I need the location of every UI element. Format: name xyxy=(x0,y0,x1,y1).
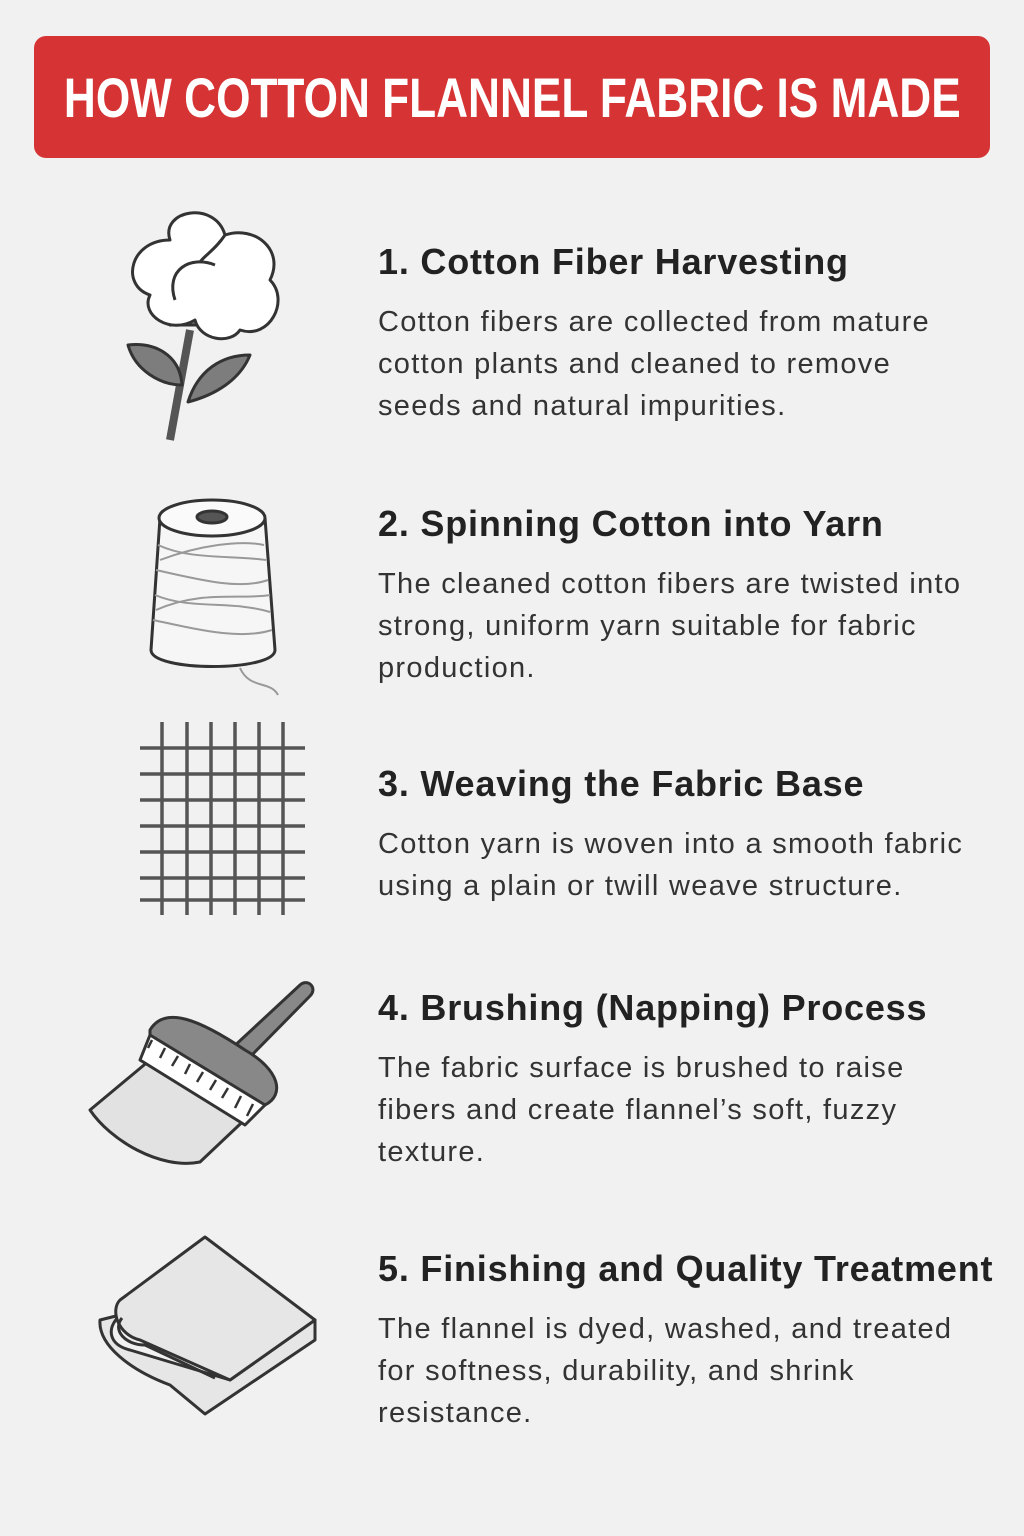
step 1: seeds and natural impurities. xyxy=(378,390,786,422)
step 3 xyxy=(378,763,963,902)
step 1: 1. Cotton Fiber Harvesting xyxy=(378,241,849,282)
step 4: 4. Brushing (Napping) Process xyxy=(378,987,927,1028)
title banner xyxy=(34,36,990,158)
icon: weave grid xyxy=(140,722,305,915)
step 4: The fabric surface is brushed to raise xyxy=(378,1052,905,1084)
step 1 xyxy=(378,241,930,422)
step 3: using a plain or twill weave structure. xyxy=(378,870,903,902)
step 2: The cleaned cotton fibers are twisted into xyxy=(378,568,961,600)
icon: cotton plant xyxy=(126,211,280,441)
step 2: production. xyxy=(378,652,536,684)
step 5: 5. Finishing and Quality Treatment xyxy=(378,1248,993,1289)
icon: yarn spool xyxy=(150,498,279,696)
step 5: resistance. xyxy=(378,1397,533,1429)
step 1: Cotton fibers are collected from mature xyxy=(378,306,930,338)
step 3: Cotton yarn is woven into a smooth fabric xyxy=(378,828,963,860)
step 4: fibers and create flannel’s soft, fuzzy xyxy=(378,1094,897,1126)
step 2: strong, uniform yarn suitable for fabric xyxy=(378,610,917,642)
icon: folded fabric xyxy=(98,1236,317,1416)
step 4: texture. xyxy=(378,1136,485,1168)
step 2: 2. Spinning Cotton into Yarn xyxy=(378,503,884,544)
step 5 xyxy=(378,1248,993,1429)
step 1: cotton plants and cleaned to remove xyxy=(378,348,891,380)
step 5: for softness, durability, and shrink xyxy=(378,1355,855,1387)
icon: brush on fabric xyxy=(88,981,314,1165)
step 5: The flannel is dyed, washed, and treated xyxy=(378,1313,952,1345)
step 4 xyxy=(378,987,927,1168)
title banner: HOW COTTON FLANNEL FABRIC IS MADE xyxy=(64,66,960,129)
step 3: 3. Weaving the Fabric Base xyxy=(378,763,864,804)
step 2 xyxy=(378,503,961,684)
